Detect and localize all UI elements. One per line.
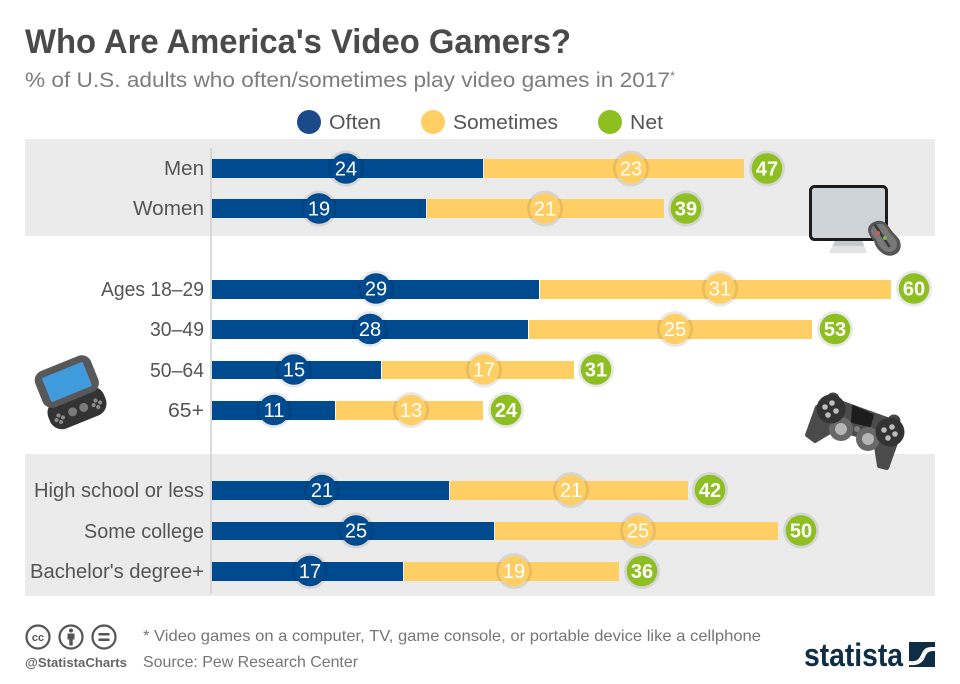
row: Men (164, 153, 782, 184)
row: Bachelor's degree+ (30, 556, 657, 586)
icon: computer monitor and mouse (810, 186, 901, 256)
legend: Net (630, 112, 663, 134)
row: Men: Men (164, 158, 204, 180)
row: High school or less (34, 475, 725, 505)
row: Men: 47 (756, 158, 778, 180)
row: Ages 18–29: 60 (903, 278, 925, 300)
row: Some college: 50 (790, 520, 812, 542)
row: High school or less: 42 (699, 480, 721, 502)
row: 30–49: 25 (664, 319, 686, 341)
row: 50–64: 17 (473, 360, 495, 382)
panel: gender background (25, 139, 935, 236)
row: Bachelor's degree+: Bachelor's degree+ (30, 561, 204, 583)
row: Some college: 25 (345, 520, 367, 542)
row: 30–49: 53 (824, 319, 846, 341)
row: Men: 24 (335, 158, 357, 180)
row: High school or less: 21 (311, 480, 333, 502)
source: Source: Pew Research Center (143, 654, 359, 671)
statista logo: statista (804, 637, 903, 673)
row: 50–64: 50–64 (150, 360, 204, 382)
row: Men: 23 (620, 158, 642, 180)
row: 30–49: 28 (359, 319, 381, 341)
row: High school or less: High school or less (34, 480, 204, 502)
subtitle: % of U.S. adults who often/sometimes play video games in 2017 (25, 69, 624, 92)
legend: Sometimes (453, 112, 558, 134)
title: Who Are America's Video Gamers? (25, 23, 571, 61)
footnote: * Video games on a computer, TV, game console, or portable device like a cellphone (143, 628, 761, 645)
row: Bachelor's degree+: 36 (631, 561, 653, 583)
row: Some college: 25 (627, 520, 649, 542)
icon: handheld console (32, 352, 110, 433)
row: Women: 39 (675, 198, 697, 220)
row: Ages 18–29 (101, 273, 929, 304)
icon: creative commons licence: cc (32, 632, 44, 644)
credit handle: @StatistaCharts (25, 656, 127, 670)
row: 65+: 65+ (168, 400, 204, 422)
row: High school or less: 21 (560, 480, 582, 502)
row: 50–64: 31 (585, 360, 607, 382)
icon: creative commons licence (26, 626, 116, 648)
row: 65+: 24 (495, 400, 518, 422)
row: 50–64: 15 (283, 360, 305, 382)
row: Women: 21 (534, 198, 556, 220)
row: Ages 18–29: 31 (709, 278, 731, 300)
row: 50–64 (150, 354, 611, 385)
row: Bachelor's degree+: 19 (503, 561, 525, 583)
row: Bachelor's degree+: 17 (299, 561, 321, 583)
panel: education background (25, 454, 935, 596)
subtitle: * (670, 69, 675, 83)
row: Women (133, 193, 701, 224)
icon: game controller (807, 392, 904, 468)
row: Women: 19 (308, 198, 330, 220)
row: 30–49 (150, 314, 850, 344)
row: 65+ (168, 395, 521, 425)
legend: Often (329, 112, 381, 134)
row: Ages 18–29: 29 (365, 278, 387, 300)
row: Some college (84, 515, 816, 546)
axis line (210, 148, 212, 594)
legend (297, 110, 663, 134)
row: 30–49: 30–49 (150, 319, 204, 341)
row: Women: Women (133, 198, 204, 220)
row: 65+: 13 (400, 400, 422, 422)
row: Ages 18–29: Ages 18–29 (101, 279, 204, 301)
row: 65+: 11 (264, 400, 284, 422)
row: Some college: Some college (84, 521, 204, 543)
